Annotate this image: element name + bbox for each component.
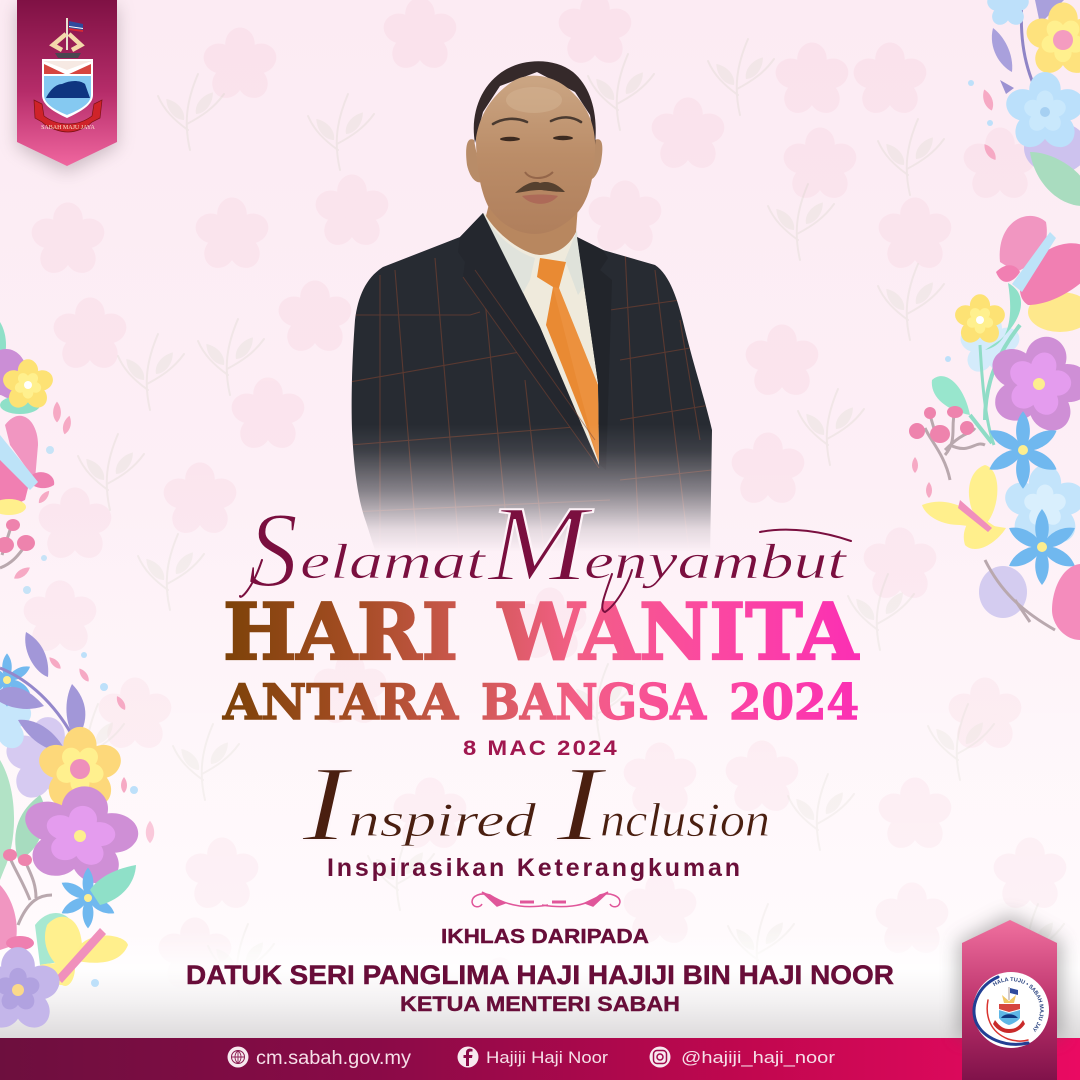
yellow butterfly bbox=[35, 913, 128, 986]
yellow flower bbox=[1023, 2, 1080, 79]
flag bbox=[67, 18, 83, 50]
floral cluster: bottom left bbox=[0, 632, 154, 1035]
main heading: ANTARA BANGSA 2024 bbox=[222, 673, 859, 731]
sender name: DATUK SERI PANGLIMA HAJI HAJIJI BIN HAJI NOOR bbox=[186, 960, 894, 990]
ribbon shadow bbox=[17, 6, 117, 172]
ribbon bbox=[962, 920, 1057, 1080]
icon: facebook bbox=[458, 1046, 478, 1068]
green leaves bbox=[0, 760, 45, 880]
main heading: HARI WANITA: WANITA bbox=[497, 587, 859, 678]
pale purple flower bbox=[979, 566, 1027, 618]
yellow wing bbox=[0, 499, 26, 515]
footer: instagram: @hajiji_haji_noor bbox=[681, 1048, 835, 1067]
blue flower bbox=[59, 868, 117, 928]
blue top flower bbox=[985, 0, 1031, 28]
main heading: Selamat Menyambut: enyambut bbox=[584, 533, 847, 589]
lower branch bbox=[985, 560, 1055, 630]
ribbon shadow bbox=[958, 914, 1062, 1038]
teal leaf bbox=[90, 865, 136, 905]
ornament divider bbox=[472, 892, 620, 907]
purple pale flower bbox=[0, 947, 64, 1035]
ears bbox=[466, 139, 602, 182]
floral cluster: right middle bbox=[909, 216, 1080, 640]
small petals bbox=[12, 402, 73, 594]
nose bbox=[525, 172, 553, 178]
back yellow blob bbox=[1028, 292, 1080, 332]
circular logo: HALA TUJU • SABAH MAJU JAYA bbox=[992, 977, 1044, 1032]
floral cluster: top right bbox=[968, 0, 1080, 206]
main heading: Selamat Menyambut bbox=[240, 485, 851, 612]
neck bbox=[486, 206, 578, 255]
floral cluster: left middle bbox=[0, 322, 73, 594]
main heading: ANTARA BANGSA 2024: 2024 bbox=[729, 673, 859, 731]
face bbox=[476, 76, 595, 213]
main heading: Selamat Menyambut: elamat bbox=[300, 533, 486, 589]
shirt collar bbox=[483, 213, 585, 295]
theme: Inspired Inclusion: nspired bbox=[348, 794, 537, 847]
forehead highlight bbox=[506, 87, 562, 113]
theme translation: Inspirasikan Keterangkuman bbox=[327, 854, 740, 882]
icon: globe bbox=[228, 1046, 248, 1068]
yellow small flower bbox=[952, 294, 1008, 347]
light blue flower bbox=[1001, 465, 1080, 549]
footer: website: cm.sabah.gov.my bbox=[256, 1048, 412, 1069]
pale flower back bbox=[2, 717, 94, 805]
theme: Inspired Inclusion bbox=[301, 745, 770, 864]
pale purple flower bbox=[1024, 122, 1080, 174]
blue lower flower bbox=[1006, 509, 1078, 585]
footer: facebook bbox=[458, 1046, 608, 1068]
suit plaid lines bbox=[352, 256, 712, 526]
pink berries bbox=[0, 519, 35, 568]
footer bar bbox=[0, 1038, 1080, 1080]
sender: IKHLAS DARIPADA: IKHLAS DARIPADA bbox=[441, 926, 649, 948]
theme: Inspired Inclusion: I bbox=[555, 745, 608, 864]
suit lapels bbox=[458, 213, 612, 470]
blue flower and light blue flower bbox=[0, 653, 35, 753]
pale blue back flower bbox=[957, 315, 1023, 377]
mouth bbox=[522, 194, 558, 204]
portrait of man in suit bbox=[350, 61, 712, 560]
arms and crown bbox=[53, 34, 81, 58]
purple flower bbox=[9, 776, 151, 898]
theme: Inspired Inclusion: I bbox=[301, 745, 354, 864]
light blue flower bbox=[1002, 72, 1080, 154]
hair bbox=[474, 61, 596, 145]
purple flower bbox=[972, 323, 1080, 447]
orange tie bbox=[537, 258, 599, 463]
top-left ribbon banner bbox=[17, 0, 117, 172]
logo motto bbox=[994, 981, 1040, 1029]
theme: Inspired Inclusion: nclusion bbox=[600, 794, 770, 847]
eyebrows bbox=[493, 117, 581, 124]
pink berries branch bbox=[909, 406, 985, 480]
pink butterfly bbox=[0, 416, 54, 512]
blue and red swoosh bbox=[974, 977, 1028, 1044]
main heading: Selamat Menyambut: S bbox=[248, 491, 298, 610]
branch and purple leaves bbox=[0, 632, 85, 752]
footer: instagram bbox=[650, 1046, 835, 1068]
berries branch bbox=[3, 849, 52, 925]
main heading: ANTARA BANGSA 2024: ANTARA bbox=[222, 673, 459, 731]
small petal and dots bbox=[912, 356, 951, 498]
main heading: ANTARA BANGSA 2024: BANGSA bbox=[481, 673, 707, 731]
yellow flower bbox=[0, 359, 56, 412]
icon: instagram bbox=[650, 1046, 670, 1068]
green leaf bbox=[1030, 152, 1080, 206]
eyes bbox=[500, 136, 573, 141]
main heading: Selamat Menyambut: M bbox=[486, 485, 594, 604]
small petals and dots bbox=[47, 652, 154, 987]
sender title: KETUA MENTERI SABAH bbox=[400, 993, 680, 1016]
moustache bbox=[515, 182, 565, 193]
petals bbox=[968, 80, 998, 162]
Sabah crest bbox=[34, 18, 102, 132]
blue flower bbox=[986, 411, 1060, 489]
mini crest bbox=[993, 987, 1025, 1033]
date: 8 MAC 2024 bbox=[463, 737, 619, 760]
script flourishes bbox=[240, 530, 851, 612]
pink wing bbox=[0, 885, 34, 950]
teal and purple back bbox=[0, 322, 40, 414]
motto ribbon: SABAH MAJU JAYA bbox=[41, 125, 96, 131]
pink rose bbox=[1052, 564, 1080, 640]
grey fade above footer bbox=[0, 930, 1080, 1040]
pink butterfly bbox=[996, 216, 1080, 305]
shirt bbox=[483, 213, 599, 465]
yellow butterfly bbox=[922, 465, 1006, 549]
main heading: HARI WANITA: HARI bbox=[223, 587, 458, 678]
ribbon bbox=[17, 0, 117, 166]
yellow flower bbox=[35, 727, 125, 813]
shield bbox=[42, 59, 93, 118]
suit jacket bbox=[352, 213, 712, 560]
footer: facebook: Hajiji Haji Noor bbox=[486, 1048, 608, 1067]
main heading: HARI WANITA bbox=[223, 587, 859, 678]
teal stem and leaves bbox=[932, 283, 1021, 445]
lower background veil bbox=[0, 450, 1080, 980]
branch and purple leaves bbox=[992, 0, 1064, 94]
